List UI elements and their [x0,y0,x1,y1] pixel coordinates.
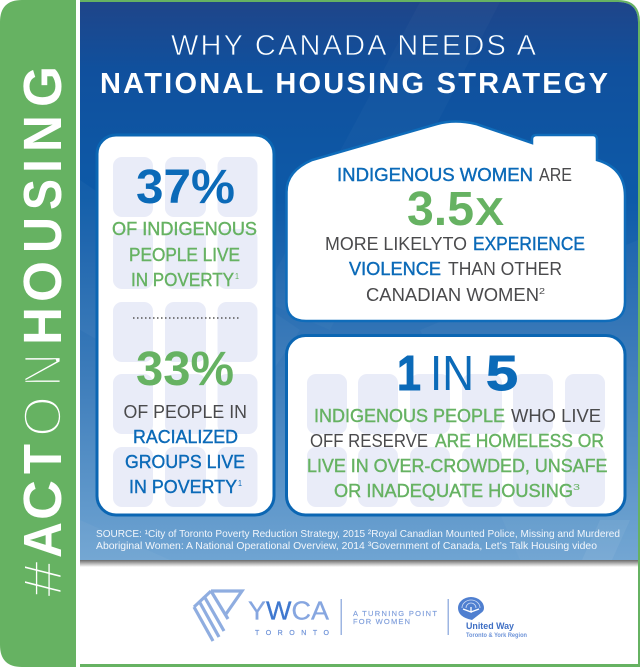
text: indigenous poverty: PEOPLE LIVE [129,244,240,265]
text: housing conditions: OR INADEQUATE HOUSING [334,480,573,501]
text: housing conditions: INDIGENOUS PEOPLE [314,405,505,426]
hashtag text: # [13,561,73,597]
hashtag text: N [13,353,73,387]
ghost people tiles [307,374,605,507]
text: indigenous poverty: OF INDIGENOUS [112,218,257,239]
stat: 33 percent: 33% [136,343,234,396]
logo: United Way: Toronto & York Region [466,633,527,639]
ghost people tiles [113,157,258,507]
stat: 1 in 5 [397,347,518,401]
logo: United Way [458,597,527,639]
stat: 1 in 5: IN [430,347,474,401]
title: WHY CANADA NEEDS A [171,30,537,62]
text: housing conditions [307,405,608,501]
tagline: A TURNING POINT [353,609,437,618]
text: housing conditions: WHO LIVE [511,405,601,426]
text: violence comparison: THAN OTHER [448,258,562,279]
text: indigenous women: INDIGENOUS WOMEN [337,164,533,185]
panel: poverty statistics card [97,135,274,515]
logo: United Way: United Way [466,621,514,631]
hashtag text: N [13,115,73,152]
text: housing conditions: LIVE IN OVER-CROWDED, UNSAFE [307,455,608,476]
hashtag text: G [13,66,73,107]
hashtag text: I [13,159,73,173]
text: housing conditions: 3 [573,483,581,492]
stat: 3.5x: X [475,191,504,234]
hashtag text: C [13,480,73,520]
text: racialized poverty: GROUPS LIVE [125,451,245,472]
panel: house violence statistic [286,122,625,321]
stat: 3.5x [407,183,504,236]
text: racialized poverty: 1 [238,479,242,488]
text: violence comparison [325,233,585,305]
text: racialized poverty: RACIALIZED [133,426,238,447]
hashtag text: A [13,522,73,558]
source note [96,528,620,552]
text: indigenous women: ARE [539,164,572,185]
text: indigenous poverty: IN POVERTY [131,269,234,290]
panel shadow [80,560,638,567]
source note: SOURCE: ¹City of Toronto Poverty Reduction Strategy, 2015 ²Royal Canadian Mounted Police, Missing and Murdered [96,528,620,540]
title [100,30,608,100]
hashtag text: U [13,217,73,253]
stat: 37 percent: 37% [136,161,235,214]
icon: United Way globe [458,597,484,620]
text: violence comparison: EXPERIENCE [473,233,585,254]
tagline: FOR WOMEN [353,617,410,626]
panel: housing statistic card [286,336,625,515]
hashtag text: H [13,307,73,345]
stat: 3.5x: 3.5 [407,183,474,236]
hashtag text: O [13,261,73,302]
logo: YWCA Toronto: YWCA [248,596,330,626]
logo: YWCA Toronto [194,591,330,641]
text: racialized poverty: IN POVERTY [129,476,237,497]
stat: 1 in 5: 5 [486,347,518,401]
text: housing conditions: OFF RESERVE [310,430,428,451]
hashtag text: S [13,179,73,210]
hashtag text: O [13,396,73,437]
text: housing conditions: ARE HOMELESS OR [435,430,604,451]
tagline [353,609,437,626]
logo: YWCA Toronto: TORONTO [255,630,330,637]
stat: 1 in 5: 1 [397,347,421,401]
panel: hashtag sidebar [0,0,76,667]
text: violence comparison: 2 [539,287,546,296]
text: violence comparison: VIOLENCE [349,258,441,279]
text: indigenous poverty: 1 [235,272,239,281]
hashtag text: T [13,444,73,474]
icon: YWCA triangles [194,591,242,641]
text: racialized poverty: OF PEOPLE IN [124,401,247,422]
source note: Aboriginal Women: A National Operational Overview, 2014 ³Government of Canada, Let’s Talk Housing video [96,540,597,552]
text: violence comparison: MORE LIKELYTO [325,233,467,254]
panel: blue background [80,2,638,560]
text: indigenous poverty [112,218,257,290]
text: racialized poverty [124,401,247,497]
text: violence comparison: CANADIAN WOMEN [366,284,539,305]
hashtag text [13,66,73,597]
title: NATIONAL HOUSING STRATEGY [100,68,608,100]
